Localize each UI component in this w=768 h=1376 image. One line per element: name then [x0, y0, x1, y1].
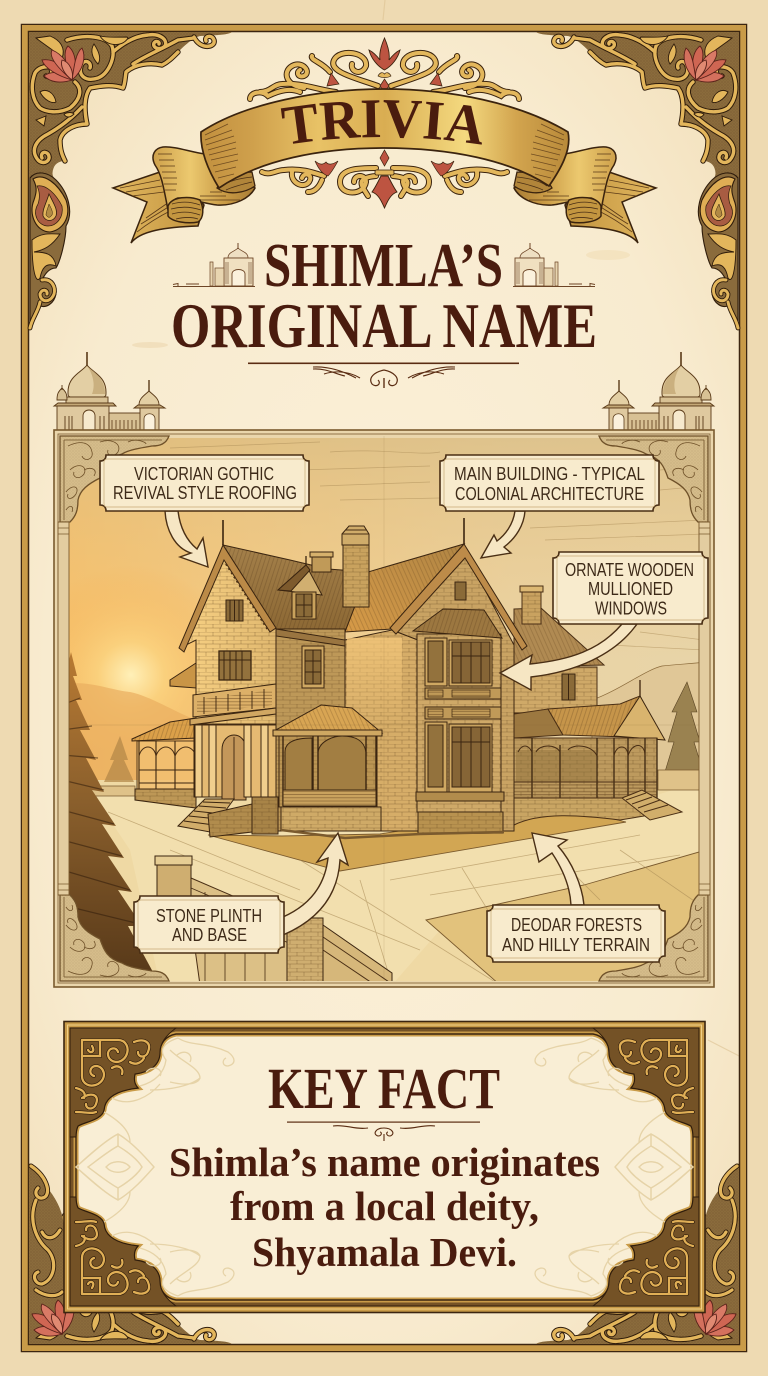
ribbon banner [113, 89, 656, 243]
arrow: deodar forests callout [532, 833, 584, 905]
image frame corners and columns [58, 436, 710, 981]
corner ornament: top right [536, 32, 739, 330]
dome towers: left [54, 352, 165, 430]
arrow: main building callout [481, 511, 525, 558]
key fact text: Shyamala Devi. [252, 1229, 517, 1275]
bay window roof [413, 609, 502, 638]
far trees [104, 736, 134, 782]
callout: wooden windows: ORNATE WOODEN [565, 560, 694, 580]
key fact panel [64, 1022, 705, 1312]
title divider [248, 362, 519, 388]
temple icon: right of title [513, 243, 595, 286]
banner hatching [205, 124, 564, 178]
house: right gable and bay window [390, 518, 527, 834]
callout: Victorian Gothic roofing: REVIVAL STYLE ROOFING [113, 483, 297, 503]
sunset sky [62, 436, 706, 985]
main title [171, 232, 597, 361]
house: left porch and balcony [132, 663, 278, 837]
arrow: windows callout [500, 624, 637, 690]
temple icon: left of title [173, 243, 255, 286]
callout: main building: COLONIAL ARCHITECTURE [455, 484, 644, 504]
key fact text: from a local deity, [230, 1183, 539, 1229]
foreground fence [155, 856, 392, 985]
key fact text: Shimla’s name originates [169, 1139, 600, 1185]
callout: main building [440, 455, 659, 511]
main title: ORIGINAL NAME [171, 291, 597, 361]
callout: Victorian Gothic roofing: VICTORIAN GOTHIC [134, 464, 274, 484]
callout: stone plinth: STONE PLINTH [156, 906, 262, 926]
callout: wooden windows: MULLIONED [588, 579, 673, 599]
dome towers: right [603, 352, 714, 430]
main title: SHIMLA’S [264, 232, 503, 300]
callout: wooden windows: WINDOWS [595, 598, 667, 618]
key fact text [169, 1139, 600, 1275]
banner title: TRIVIA: TRIVIA [280, 100, 482, 145]
banner centre band [201, 89, 569, 188]
illustration panel [54, 430, 714, 1312]
arrow: roofing callout [165, 511, 208, 567]
corner ornament: bottom left [29, 1163, 232, 1344]
callout: stone plinth [134, 896, 284, 953]
house: right wing [514, 586, 682, 825]
callout: deodar forests: AND HILLY TERRAIN [502, 935, 650, 955]
callout: deodar forests [487, 905, 665, 962]
callout: Victorian Gothic roofing [100, 455, 309, 511]
corner ornament: bottom right [536, 1163, 739, 1344]
front steps [178, 799, 234, 832]
watermark ornaments [76, 1038, 693, 1296]
cream panel [76, 1034, 693, 1300]
house: central chimney and back roof [223, 526, 464, 632]
callout: main building: MAIN BUILDING - TYPICAL [454, 464, 645, 484]
heading: key fact: KEY FACT [268, 1056, 500, 1121]
banner title: TRIVIA [280, 100, 482, 145]
callout: stone plinth: AND BASE [172, 925, 247, 945]
top filigree ornament [250, 38, 519, 99]
callout: wooden windows [553, 552, 708, 624]
key fact divider [287, 1122, 480, 1141]
house: centre walls [276, 629, 418, 831]
panel corner knotwork [70, 1028, 699, 1306]
house: dormer window [278, 556, 322, 619]
house: front gazebo porch [273, 705, 504, 838]
corner ornament: top left [29, 32, 232, 330]
left deodar tree [69, 652, 152, 970]
fold creases [62, 436, 706, 980]
bottom filigree ornament [262, 150, 507, 208]
ground and paving [98, 780, 658, 838]
arrow: stone plinth callout [283, 833, 348, 935]
right porch [514, 709, 563, 738]
callout: deodar forests: DEODAR FORESTS [511, 915, 642, 935]
mountains [76, 683, 194, 780]
house: left gable wing [179, 520, 276, 724]
